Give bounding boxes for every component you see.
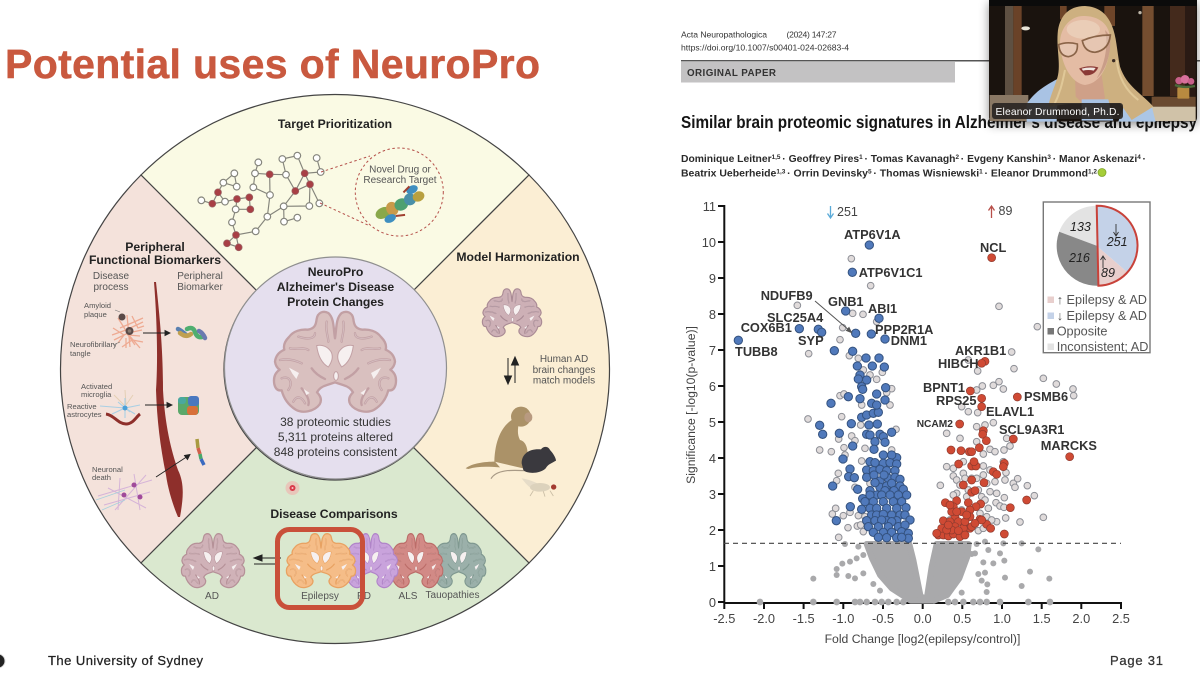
NDUFB9 leader line	[815, 301, 852, 332]
y axis tick labels: 6	[709, 379, 716, 394]
author list: 3	[1047, 154, 1051, 161]
callout: novel drug or research target: Novel Drug or	[369, 164, 432, 176]
author list: 2	[955, 154, 959, 161]
arrows: comparison	[254, 555, 281, 564]
x axis tick labels: 2.5	[1112, 611, 1130, 626]
icon: large brain section	[274, 312, 396, 412]
author list: ·	[1143, 153, 1146, 165]
label: neurofibrillary tangle: tangle	[70, 349, 91, 358]
icon: AD brain	[181, 534, 245, 588]
pie: light grey inconsistent	[1059, 206, 1097, 246]
pie value labels: 133	[1070, 220, 1091, 234]
y axis tick labels: 5	[709, 415, 716, 430]
author list continued: · Eleanor Drummond	[985, 168, 1088, 180]
count: 251 down: 251	[837, 205, 858, 219]
count: 89 up: 89	[998, 204, 1012, 218]
pie: dark grey opposite	[1057, 232, 1098, 286]
icon: mouse	[491, 447, 556, 479]
panel: central NeuroPro summary	[224, 257, 446, 479]
protein labels: COX6B1	[741, 320, 792, 335]
heading: peripheral functional biomarkers: Peripheral	[125, 240, 185, 254]
pie value labels	[1068, 220, 1128, 280]
arrows: bidirectional match	[504, 357, 518, 384]
icon: tauopathies brain	[431, 534, 486, 588]
significance threshold line	[724, 542, 1121, 544]
column label: peripheral biomarker: Peripheral	[177, 271, 223, 282]
protein labels: ABI1	[868, 301, 897, 316]
volcano plot	[684, 199, 1150, 646]
author list: 4	[1137, 154, 1141, 161]
icon: ALS brain	[388, 534, 443, 588]
legend: ↑ Epilepsy & AD	[1057, 293, 1147, 307]
author list continued: 1	[979, 168, 983, 176]
callout: novel drug or research target	[320, 148, 443, 236]
icon: microglia and astrocytes	[100, 390, 140, 424]
text: study statistics: 848 proteins consistent	[274, 445, 398, 459]
author list: · Tomas Kavanagh	[864, 153, 957, 165]
y axis tick labels: 2	[709, 523, 716, 538]
author list: 1,5	[772, 154, 781, 161]
protein labels	[735, 227, 1097, 453]
text: study statistics: 5,311 proteins altered	[278, 430, 393, 444]
axes	[718, 205, 1121, 609]
y axis tick labels: 11	[703, 199, 716, 214]
protein labels: DNM1	[891, 333, 927, 348]
label: ALS: ALS	[399, 591, 418, 602]
video: glasses	[1059, 35, 1110, 57]
x axis tick labels: -2.0	[753, 611, 775, 626]
heading: NeuroPro Alzheimer's disease protein changes: Protein Changes	[287, 295, 384, 309]
protein labels: GNB1	[828, 294, 864, 309]
icon: human brain section	[482, 289, 542, 337]
pie value labels: 89	[1101, 266, 1115, 280]
icon: biomarker protein ribbon	[178, 328, 205, 338]
text: human AD brain changes match models: Human AD	[540, 354, 588, 365]
slide title: Potential uses of NeuroPro	[5, 41, 540, 87]
y axis tick labels: 4	[709, 451, 716, 466]
protein labels: SYP	[798, 333, 824, 348]
legend	[1048, 293, 1148, 354]
presenter cursor marker	[0, 654, 5, 668]
heading: NeuroPro Alzheimer's disease protein changes: NeuroPro	[308, 265, 363, 279]
label: neuronal death: death	[92, 473, 111, 482]
pie: blue down	[1097, 206, 1137, 272]
y axis tick labels: 3	[709, 487, 716, 502]
label: neurofibrillary tangle: Neurofibrillary	[70, 340, 117, 349]
label: tauopathies: Tauopathies	[426, 590, 479, 601]
y axis tick labels: 0	[709, 595, 716, 610]
protein labels: RPS25	[936, 393, 977, 408]
icon: epilepsy brain	[286, 534, 356, 588]
x axis tick labels: -0.5	[872, 611, 894, 626]
highlight box around epilepsy	[278, 530, 362, 608]
pie highlight outline	[1097, 206, 1138, 286]
icon: protein target	[370, 182, 429, 227]
label: reactive astrocytes: Reactive	[67, 402, 97, 411]
label: amyloid plaque: plaque	[84, 310, 107, 319]
y axis tick labels: 1	[709, 559, 716, 574]
pie value labels: 251	[1106, 235, 1128, 249]
author list: · Manor Askenazi	[1053, 153, 1139, 165]
protein labels: ATP6V1A	[844, 227, 901, 242]
x axis tick labels	[713, 611, 1130, 626]
panel: disease comparisons	[141, 448, 529, 644]
author list continued: 1,2	[1088, 168, 1097, 176]
label: activated microglia: Activated	[81, 382, 112, 391]
icon: biomarker peptide strip	[197, 439, 204, 465]
label: AD: AD	[205, 591, 219, 602]
legend: Opposite	[1057, 324, 1107, 338]
count: 251 down	[828, 205, 858, 219]
laser pointer dot	[286, 481, 300, 495]
protein labels: MARCKS	[1041, 438, 1097, 453]
NeuroPro wheel diagram	[60, 94, 610, 644]
presenter video overlay	[989, 0, 1197, 122]
heading: model harmonization: Model Harmonization	[456, 250, 580, 264]
footer: page number: Page 31	[1110, 653, 1163, 668]
x axis tick labels: 0.5	[953, 611, 971, 626]
y axis tick labels: 9	[709, 271, 716, 286]
label: reactive astrocytes: astrocytes	[67, 410, 102, 419]
up-regulated proteins (red)	[933, 254, 1074, 541]
legend: ↓ Epilepsy & AD	[1057, 309, 1147, 323]
pie value labels: 216	[1068, 251, 1090, 265]
arrow: plaque to biomarker	[143, 330, 170, 336]
protein labels: PPP2R1A	[875, 322, 933, 337]
protein labels: NCAM2	[917, 419, 953, 430]
protein labels: PSMB6	[1024, 389, 1068, 404]
y axis tick labels: 8	[709, 307, 716, 322]
author list continued: Beatrix Ueberheide	[681, 168, 777, 180]
column label: disease process: process	[93, 282, 129, 293]
x axis tick labels: 1.0	[993, 611, 1011, 626]
icon: amyloid plaque and tangle cells	[112, 310, 144, 348]
x axis tick labels: 2.0	[1072, 611, 1090, 626]
protein labels: TUBB8	[735, 344, 778, 359]
heading: peripheral functional biomarkers: Functional Biomarkers	[89, 253, 221, 267]
protein labels: BPNT1	[923, 380, 965, 395]
original paper banner	[681, 62, 955, 82]
column label: disease process: Disease	[93, 271, 129, 282]
y axis tick labels: 10	[702, 235, 716, 250]
x axis tick labels: -1.0	[832, 611, 854, 626]
x axis tick labels: 0.0	[914, 611, 932, 626]
author list continued: 5	[868, 168, 872, 176]
author list: · Geoffrey Pires	[782, 153, 860, 165]
x axis tick labels: -1.5	[793, 611, 815, 626]
footer: university name: The University of Sydney	[48, 653, 204, 668]
author list: Dominique Leitner	[681, 153, 773, 165]
panel: peripheral functional biomarkers	[60, 175, 256, 563]
legend: Inconsistent; AD	[1057, 340, 1148, 354]
network diagram	[198, 152, 324, 251]
author list continued: 1,3	[776, 168, 786, 176]
icon: monkey	[466, 407, 532, 469]
icon: PD brain	[343, 534, 398, 588]
icon: biomarker protein patch	[178, 396, 199, 415]
video: mouth	[1079, 66, 1098, 75]
icon: fruit fly	[522, 478, 556, 497]
column label: peripheral biomarker: Biomarker	[177, 282, 223, 293]
protein labels: NCL	[980, 240, 1006, 255]
video: flowers on sill	[1175, 75, 1195, 99]
non-significant proteins (grey)	[757, 539, 1053, 605]
doi: https://doi.org/10.1007/s00401-024-02683-4	[681, 42, 849, 52]
video background: window frames	[990, 6, 1196, 121]
presenter name tag: Eleanor Drummond, Ph.D.	[996, 107, 1120, 118]
count: 89 up	[988, 204, 1012, 218]
callout: novel drug or research target: Research Target	[363, 175, 437, 186]
text: human AD brain changes match models: brain changes	[533, 365, 595, 376]
journal citation: Acta Neuropathologica	[681, 30, 767, 40]
protein labels: ELAVL1	[986, 404, 1034, 419]
protein labels: NDUFB9	[761, 288, 813, 303]
heading: disease comparisons: Disease Comparisons	[270, 507, 398, 521]
y axis tick labels: 7	[709, 343, 716, 358]
icon: dying neurons	[96, 474, 152, 510]
protein labels: HIBCH	[938, 356, 979, 371]
author list continued: · Thomas Wisniewski	[873, 168, 980, 180]
label: activated microglia: microglia	[81, 390, 112, 399]
label: PD: PD	[357, 591, 371, 602]
author list: 1	[859, 154, 863, 161]
heading: NeuroPro Alzheimer's disease protein changes: Alzheimer's Disease	[277, 280, 394, 294]
author list continued: · Orrin Devinsky	[787, 168, 868, 180]
pale non-consistent proteins	[794, 255, 1077, 541]
arrow: neuronal death to biomarker	[156, 454, 190, 477]
x axis tick labels: -2.5	[713, 611, 735, 626]
author list: · Evgeny Kanshin	[961, 153, 1049, 165]
x axis tick labels: 1.5	[1033, 611, 1051, 626]
icon: ORCID	[1098, 168, 1106, 176]
arrow: microglia to biomarker	[145, 402, 172, 408]
panel: target prioritization	[141, 94, 529, 291]
protein labels: SCL9A3R1	[999, 422, 1064, 437]
text: study statistics: 38 proteomic studies	[280, 415, 391, 429]
protein labels: SLC25A4	[767, 310, 824, 325]
journal volume: (2024) 147:27	[786, 30, 837, 40]
protein labels: AKR1B1	[955, 343, 1006, 358]
y axis title: Significance [-log10(p-value)]	[684, 326, 698, 484]
text: human AD brain changes match models: match models	[533, 376, 595, 386]
label: epilepsy: Epilepsy	[301, 591, 339, 602]
original paper banner: ORIGINAL PAPER	[687, 68, 776, 79]
x axis title: Fold Change [log2(epilepsy/control)]	[825, 632, 1020, 646]
y axis tick labels	[702, 199, 716, 610]
panel: model harmonization	[414, 175, 610, 563]
icon: blood vessel	[154, 282, 183, 517]
protein labels: ATP6V1C1	[859, 265, 922, 280]
inset pie chart and legend	[1043, 202, 1150, 354]
paper header	[681, 30, 1200, 180]
label: neuronal death: Neuronal	[92, 465, 123, 474]
presenter name tag	[992, 103, 1123, 119]
video: presenter	[1027, 6, 1156, 122]
label: amyloid plaque: Amyloid	[84, 301, 111, 310]
down-regulated proteins (blue)	[734, 241, 914, 542]
heading: target prioritization: Target Prioritization	[278, 117, 392, 131]
pie: pink up	[1097, 246, 1127, 286]
